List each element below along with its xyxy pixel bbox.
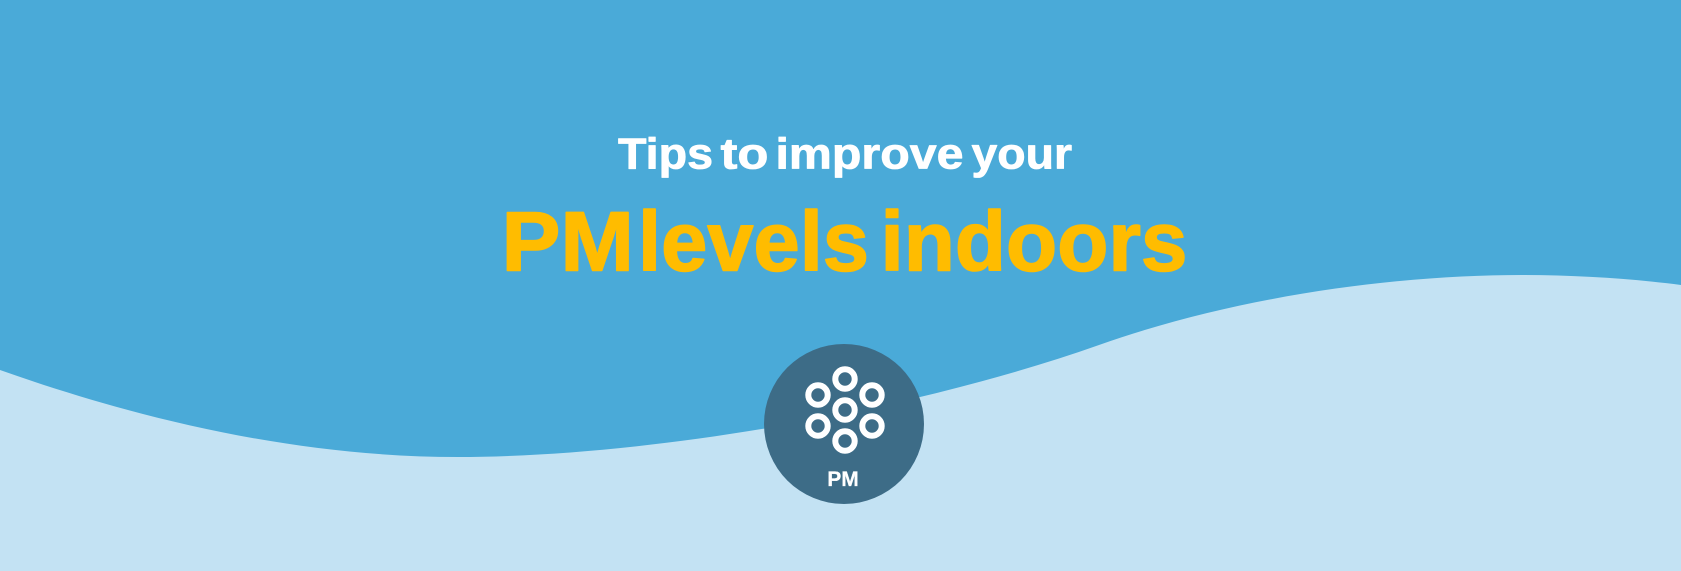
badge circle xyxy=(764,344,924,504)
heading: PM levels indoors: PM xyxy=(502,194,634,288)
icon: PM badge xyxy=(764,344,924,504)
heading: tips line xyxy=(618,130,1072,178)
particle rings xyxy=(808,369,882,451)
heading: PM levels indoors: levels xyxy=(638,194,869,288)
heading: tips line: Tips xyxy=(618,130,713,178)
heading: tips line: your xyxy=(972,130,1072,178)
heading: PM levels indoors xyxy=(502,194,1188,288)
badge label: PM xyxy=(827,468,859,491)
heading: tips line: improve xyxy=(776,130,964,178)
heading: PM levels indoors: indoors xyxy=(880,194,1188,288)
background: light blue wave xyxy=(0,275,1681,571)
heading: tips line: to xyxy=(720,130,768,178)
